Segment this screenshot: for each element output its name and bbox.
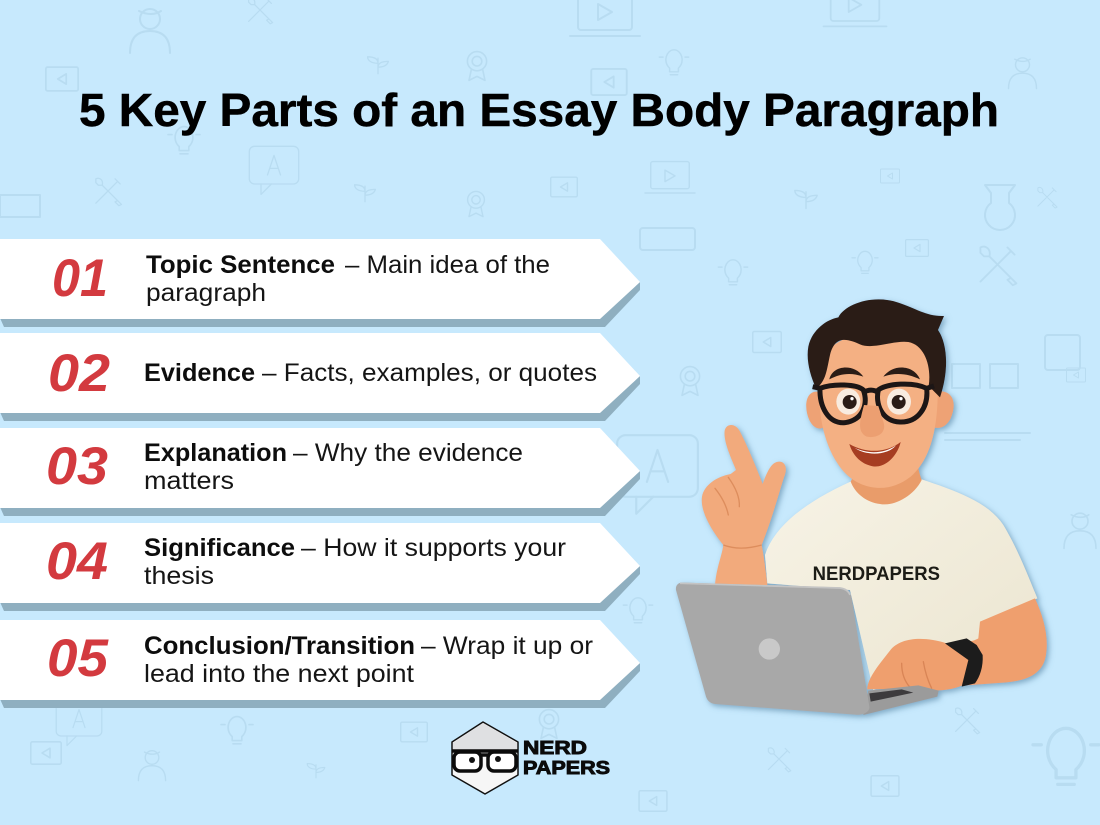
text: explanation: matters: [144, 467, 234, 495]
illustration: man with laptop pointing up: [676, 299, 1047, 715]
number 02: 02: [48, 344, 110, 403]
panel: item 02 evidence: [0, 333, 640, 421]
logo text: PAPERS: [523, 758, 610, 778]
shirt text: NERDPAPERS: [813, 564, 940, 585]
panel: item 01 topic sentence: [0, 239, 640, 327]
laptop: [676, 583, 939, 715]
glasses: [813, 384, 934, 423]
text: evidence: Evidence: [144, 359, 255, 387]
text: significance: – How it supports your: [301, 534, 566, 562]
number 05: 05: [47, 629, 110, 688]
text: significance: thesis: [144, 562, 214, 590]
text: explanation: Explanation: [144, 439, 287, 467]
text: topic sentence: – Main idea of the: [345, 251, 550, 279]
face: [819, 331, 938, 488]
text: conclusion: [144, 632, 593, 688]
eyebrows: [829, 368, 920, 379]
text: conclusion: Conclusion/Transition: [144, 632, 415, 660]
text: topic sentence: [146, 251, 550, 307]
neck: [851, 460, 922, 504]
text: significance: Significance: [144, 534, 295, 562]
number 04: 04: [46, 532, 108, 591]
logo icon: hexagon with glasses: [452, 722, 518, 794]
ears: [806, 391, 954, 428]
t-shirt: [765, 479, 1037, 690]
text: explanation: – Why the evidence: [293, 439, 523, 467]
logo: [452, 722, 610, 794]
text: explanation: [144, 439, 523, 495]
text: topic sentence: paragraph: [146, 279, 266, 307]
text: evidence: – Facts, examples, or quotes: [262, 359, 597, 387]
text: topic sentence: Topic Sentence: [146, 251, 335, 279]
logo text: NERD: [523, 738, 587, 758]
mouth: [849, 442, 901, 466]
right arm and hand: [867, 598, 1047, 690]
text: conclusion: – Wrap it up or: [421, 632, 593, 660]
panel: item 03 explanation: [0, 428, 640, 516]
text: significance: [144, 534, 566, 590]
number 01: 01: [52, 249, 108, 308]
hair: [808, 299, 946, 397]
panel: item 05 conclusion: [0, 620, 640, 708]
smartwatch: [945, 638, 983, 687]
eyes: [836, 389, 911, 415]
number 03: 03: [46, 437, 108, 496]
title: 5 Key Parts of an Essay Body Paragraph: [79, 84, 999, 136]
panel: item 04 significance: [0, 523, 640, 611]
logo text: [523, 738, 610, 778]
nose: [860, 405, 884, 437]
text: conclusion: lead into the next point: [144, 660, 414, 688]
raised arm and hand: [702, 425, 786, 585]
